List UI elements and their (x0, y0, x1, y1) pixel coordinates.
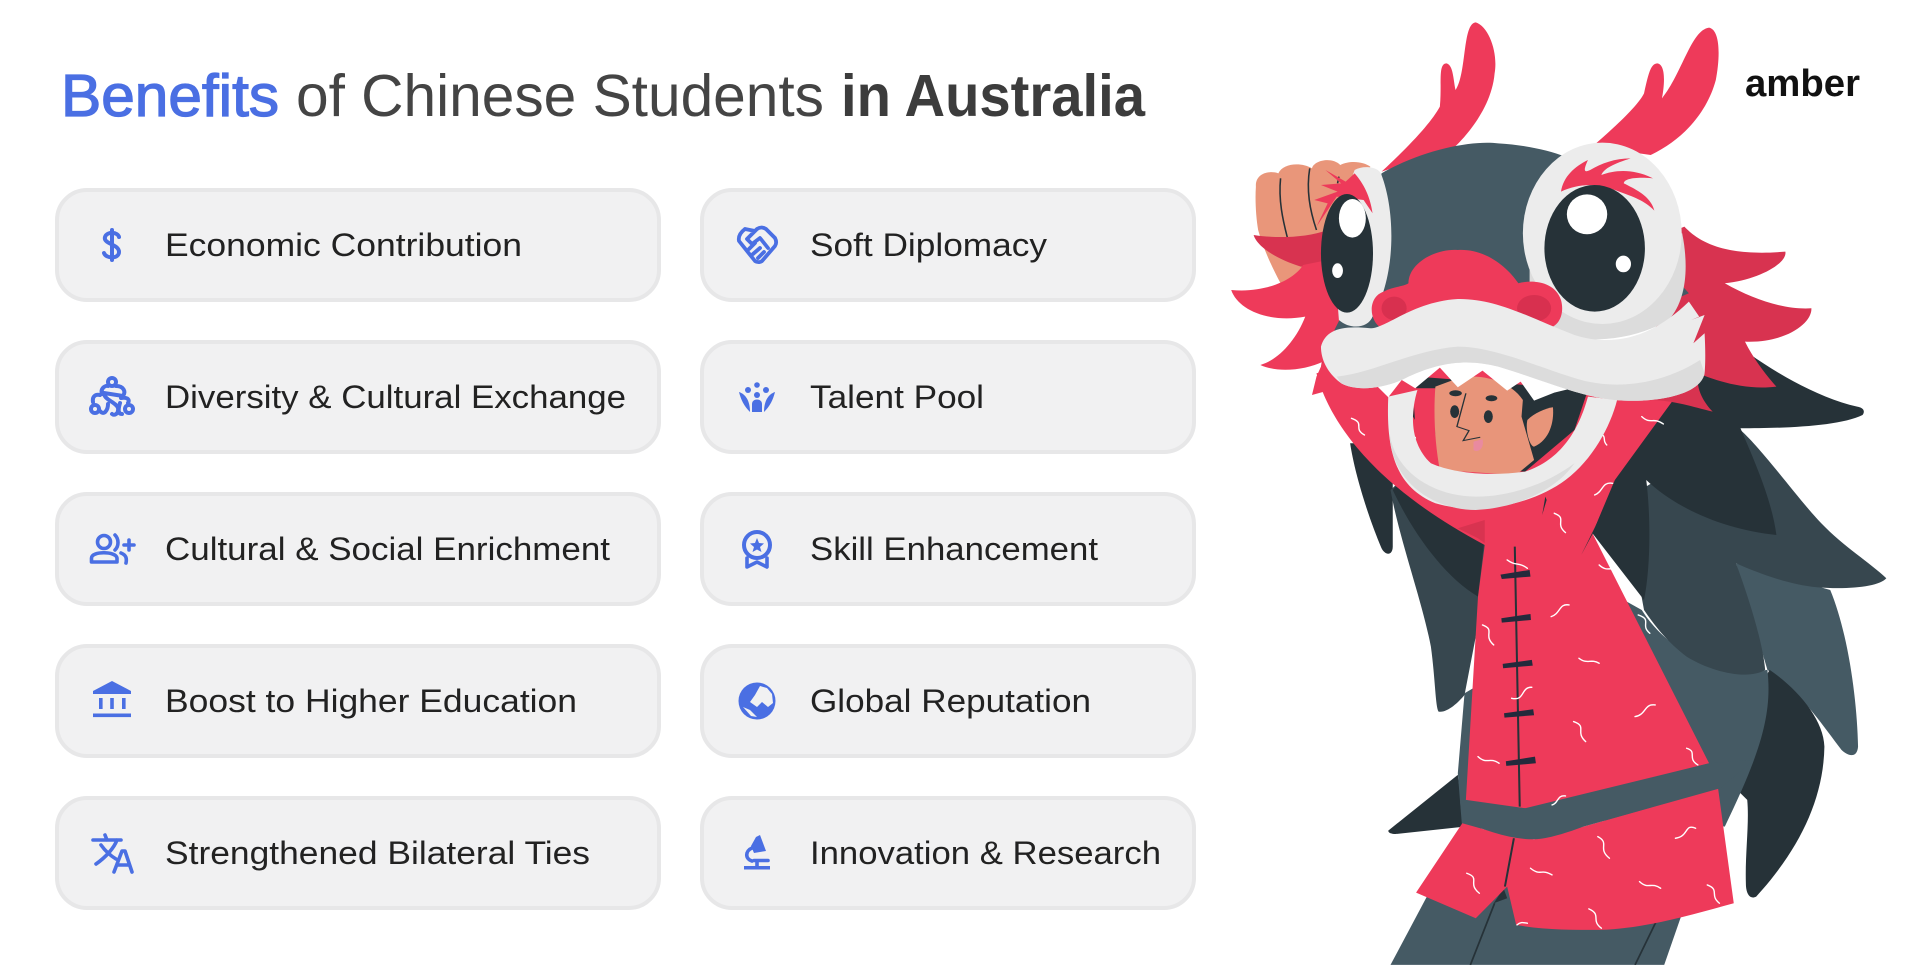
title: Benefits (61, 63, 279, 129)
right red mane tufts (1646, 227, 1811, 412)
back mane feather (1624, 430, 1886, 675)
jacket skirt (1416, 788, 1734, 930)
label: Skill Enhancement (810, 531, 1098, 567)
performer face (1434, 376, 1553, 475)
center placket lines (1505, 547, 1520, 887)
raised hand (1256, 160, 1370, 283)
jacket torso and sleeves (1316, 333, 1709, 808)
icon: handshake (739, 228, 776, 262)
left mane feathers (1350, 443, 1489, 834)
icon: talent hands (739, 382, 775, 412)
label: Boost to Higher Education (165, 683, 577, 719)
sleeve creases (1542, 497, 1606, 555)
open mouth backing (1413, 377, 1588, 472)
label: Soft Diplomacy (810, 227, 1047, 263)
icon: microscope (744, 835, 770, 870)
panel: Strengthened Bilateral Ties (57, 798, 659, 908)
icon: award badge (744, 532, 770, 567)
illustration: lion dance mascot (1231, 22, 1886, 965)
mustache (1321, 299, 1705, 401)
panel: Boost to Higher Education (57, 646, 659, 756)
nose (1372, 250, 1562, 328)
label: Innovation & Research (810, 835, 1161, 871)
panel: Soft Diplomacy (702, 190, 1194, 300)
left red mane tufts (1254, 230, 1364, 383)
teeth (1373, 360, 1579, 401)
head dome (1334, 143, 1689, 348)
logo: amber: amber (1745, 63, 1860, 105)
title (61, 63, 1146, 129)
panel: Diversity & Cultural Exchange (57, 342, 659, 452)
left eye (1314, 167, 1391, 327)
frog buttons (1500, 570, 1536, 766)
antler horns (1382, 22, 1719, 172)
icon: dollar (104, 230, 119, 260)
lower right mane feathers (1714, 563, 1858, 897)
icon: institution (93, 681, 131, 717)
icon: person add (92, 535, 134, 563)
jaw ring (1388, 390, 1617, 510)
panel: Cultural & Social Enrichment (57, 494, 659, 604)
panel: Innovation & Research (702, 798, 1194, 908)
top dark mane spike (1592, 333, 1864, 600)
right eye (1523, 143, 1686, 340)
belt (1460, 760, 1754, 839)
label: Talent Pool (810, 379, 984, 415)
panel: Global Reputation (702, 646, 1194, 756)
panel: Skill Enhancement (702, 494, 1194, 604)
icon: translate (93, 835, 132, 872)
label: Diversity & Cultural Exchange (165, 379, 626, 415)
label: Economic Contribution (165, 227, 522, 263)
body under jacket (1458, 600, 1769, 830)
panel: Talent Pool (702, 342, 1194, 452)
panel: Economic Contribution (57, 190, 659, 300)
jacket squiggles (1351, 417, 1719, 928)
collar shade (1458, 520, 1485, 543)
icon: cultural exchange knot (91, 378, 133, 415)
pants (1391, 880, 1682, 965)
label: Global Reputation (810, 683, 1091, 719)
left red mane lower tufts (1231, 260, 1355, 395)
title: in Australia (841, 63, 1146, 129)
label: Strengthened Bilateral Ties (165, 835, 590, 871)
icon: globe (738, 682, 776, 720)
mouth red interior (1413, 388, 1440, 470)
label: Cultural & Social Enrichment (165, 531, 610, 567)
title: of Chinese Students (296, 63, 824, 129)
